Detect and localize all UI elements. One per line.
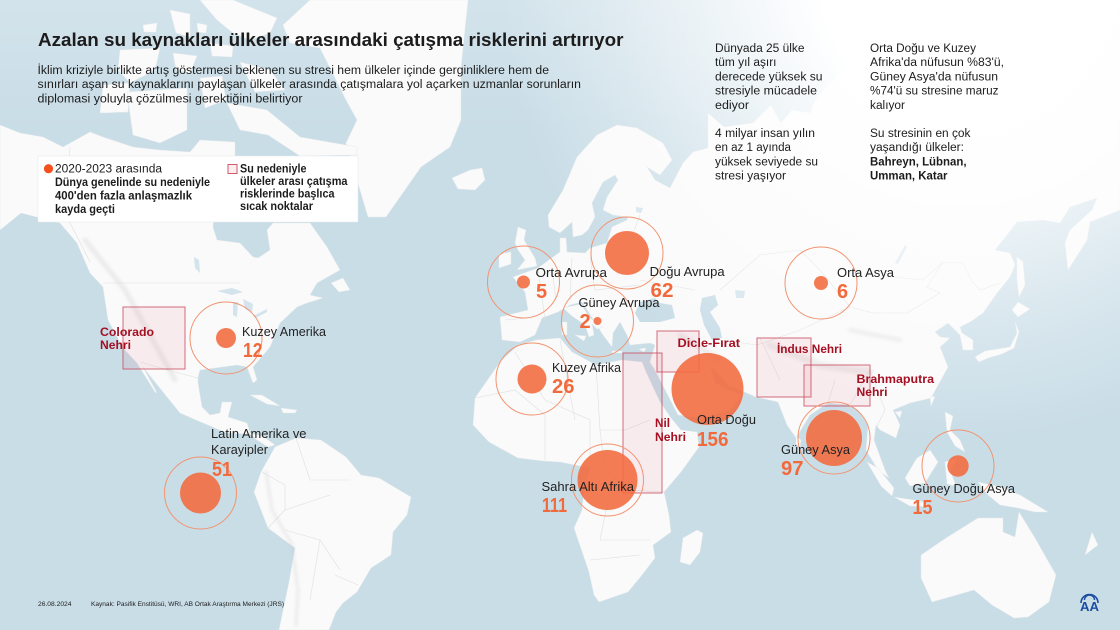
legend: conflict text bbox=[55, 164, 210, 216]
land: Newfoundland bbox=[331, 278, 350, 292]
region: Güney Doğu Asya: Güney Doğu Asya bbox=[912, 482, 1015, 496]
region: Kuzey Amerika: Kuzey Amerika bbox=[242, 325, 326, 339]
facts column 2: Su stresinin en çok bbox=[870, 128, 971, 140]
region: Sahra Altı Afrika: Sahra Altı Afrika bbox=[542, 480, 634, 494]
intro paragraph: sınırları aşan su kaynaklarını paylaşan ülkeler arasında çatışmalara yol açarken uzmanlar sorunların bbox=[38, 79, 581, 91]
hotspot: Brahmaputra Nehri: Brahmaputra bbox=[856, 372, 934, 386]
facts column 2 bbox=[870, 43, 1004, 182]
region: Latin Amerika ve Karayipler: Latin Amerika ve bbox=[211, 427, 307, 441]
land: Greenland bbox=[283, 0, 468, 217]
facts column 1 bbox=[715, 43, 822, 182]
land: Australia bbox=[921, 512, 1056, 618]
legend: hotspot text: ülkeler arası çatışma bbox=[240, 176, 348, 188]
facts column 2: Güney Asya'da nüfusun bbox=[870, 72, 998, 84]
region: Orta Avrupa bbox=[488, 246, 607, 318]
region: Sahra Altı Afrika bbox=[542, 444, 644, 517]
facts column 2: Afrika'da nüfusun %83'ü, bbox=[870, 57, 1004, 69]
date: 26.08.2024 bbox=[38, 601, 72, 608]
land: Indonesia and Philippines bbox=[796, 411, 1098, 555]
land: Africa bbox=[473, 338, 699, 602]
hotspot: Dicle-Fırat: Dicle-Fırat bbox=[678, 336, 740, 350]
land: South America bbox=[254, 438, 411, 630]
legend: conflict text: kayda geçti bbox=[55, 204, 115, 216]
facts column 2: Umman, Katar bbox=[870, 170, 948, 182]
region: Latin Amerika ve Karayipler: Karayipler bbox=[211, 443, 268, 457]
hotspot: Dicle-Fırat bbox=[657, 331, 740, 372]
region: Kuzey Amerika bbox=[190, 302, 326, 374]
hotspot: İndus Nehri bbox=[757, 338, 842, 397]
title: Azalan su kaynakları ülkeler arasındaki çatışma risklerini artırıyor bbox=[38, 30, 624, 50]
hotspot: Colorado Nehri: Colorado bbox=[100, 325, 154, 339]
source: Kaynak: Pasifik Enstitüsü, WRI, AB Ortak Araştırma Merkezi (JRS) bbox=[91, 601, 284, 608]
map top fade bbox=[0, 0, 1120, 500]
hotspot: Colorado Nehri bbox=[100, 307, 185, 369]
hotspot: Brahmaputra Nehri: Nehri bbox=[856, 385, 888, 399]
legend: conflict text: Dünya genelinde su nedeniyle bbox=[55, 177, 210, 189]
region: Orta Asya: 6 bbox=[837, 281, 848, 303]
region: Kuzey Amerika: 12 bbox=[243, 340, 262, 362]
land: Italy and Mediterranean islands bbox=[562, 304, 646, 353]
region: Orta Doğu: Orta Doğu bbox=[697, 413, 756, 427]
intro paragraph: İklim kriziyle birlikte artış göstermesi beklenen su stresi hem ülkeler içinde gerginliklere hem de bbox=[38, 64, 549, 77]
region: Güney Avrupa: Güney Avrupa bbox=[578, 296, 660, 310]
facts column 1: yüksek seviyede su bbox=[715, 156, 818, 168]
region: Güney Avrupa: 2 bbox=[580, 311, 591, 333]
legend: hotspot text: Su nedeniyle bbox=[240, 164, 306, 176]
facts column 2: Bahreyn, Lübnan, bbox=[870, 156, 966, 168]
region: Latin Amerika ve Karayipler bbox=[164, 427, 307, 529]
legend: hotspot text: risklerinde başlıca bbox=[240, 189, 335, 201]
region: Kuzey Afrika: Kuzey Afrika bbox=[552, 361, 621, 375]
region: Orta Asya bbox=[785, 247, 894, 319]
region: Güney Asya: 97 bbox=[781, 458, 804, 480]
seas: Black Sea, Caspian Sea, Baikal and lakes bbox=[635, 207, 907, 340]
region: Latin Amerika ve Karayipler: 51 bbox=[212, 459, 232, 481]
hotspot: Nil Nehri: Nehri bbox=[655, 430, 686, 444]
facts column 1: tüm yıl aşırı bbox=[715, 57, 776, 69]
land: Japan, Sakhalin and Taiwan bbox=[930, 257, 1030, 406]
region: Güney Avrupa bbox=[562, 285, 660, 357]
hotspot: İndus Nehri: İndus Nehri bbox=[777, 341, 842, 356]
region: Doğu Avrupa bbox=[591, 217, 725, 302]
region: Orta Avrupa: Orta Avrupa bbox=[536, 266, 607, 280]
facts column 1: stresi yaşıyor bbox=[715, 170, 786, 182]
region: Orta Asya: Orta Asya bbox=[837, 266, 894, 280]
intro paragraph: diplomasi yoluyla çözülmesi gerektiğini belirtiyor bbox=[38, 94, 303, 106]
land: United Kingdom and Ireland bbox=[499, 227, 537, 270]
country borders bbox=[66, 147, 1000, 600]
land: Iceland bbox=[452, 168, 485, 190]
facts column 1: ediyor bbox=[715, 100, 749, 112]
hotspot: Colorado Nehri: Nehri bbox=[100, 338, 131, 352]
region: Güney Doğu Asya bbox=[912, 430, 1015, 519]
legend: conflict text: 400'den fazla anlaşmazlık bbox=[55, 190, 193, 202]
facts column 1: 4 milyar insan yılın bbox=[715, 128, 815, 140]
facts column 1: stresiyle mücadele bbox=[715, 86, 817, 98]
facts column 1: Dünyada 25 ülke bbox=[715, 43, 804, 55]
region: Kuzey Afrika bbox=[496, 343, 621, 415]
intro paragraph bbox=[38, 64, 581, 106]
region: Güney Asya: Güney Asya bbox=[781, 443, 850, 457]
region: Sahra Altı Afrika: 111 bbox=[542, 495, 567, 517]
land: Eurasia bbox=[500, 0, 1120, 478]
legend: hotspot square bbox=[228, 164, 237, 174]
legend: conflict dot bbox=[44, 164, 53, 173]
facts column 1: derecede yüksek su bbox=[715, 72, 822, 84]
land: Madagascar bbox=[680, 530, 703, 565]
region: Orta Avrupa: 5 bbox=[536, 281, 547, 303]
region: Güney Doğu Asya: 15 bbox=[912, 497, 932, 519]
facts column 2: kalıyor bbox=[870, 100, 905, 112]
region: Güney Asya bbox=[781, 402, 870, 480]
facts column 2: %74'ü su stresine maruz bbox=[870, 86, 999, 98]
facts column 2: Orta Doğu ve Kuzey bbox=[870, 43, 976, 55]
region: Orta Doğu: 156 bbox=[697, 429, 728, 451]
region: Doğu Avrupa: 62 bbox=[650, 280, 674, 302]
mountain relief bbox=[85, 240, 900, 625]
lakes: North America bbox=[194, 257, 267, 318]
hotspot: Nil Nehri: Nil bbox=[655, 416, 670, 430]
legend: hotspot text bbox=[240, 164, 348, 213]
legend: conflict text: 2020-2023 arasında bbox=[55, 164, 163, 176]
region: Orta Doğu bbox=[672, 353, 756, 451]
icon: AA logo: AA bbox=[1080, 599, 1100, 614]
hotspot: Brahmaputra Nehri bbox=[804, 365, 934, 406]
hotspot: Nil Nehri bbox=[623, 353, 686, 493]
legend: hotspot text: sıcak noktalar bbox=[240, 201, 313, 213]
land: Canadian Arctic islands bbox=[100, 0, 357, 156]
legend panel bbox=[38, 156, 358, 222]
region: Kuzey Afrika: 26 bbox=[552, 376, 574, 398]
facts column 1: en az 1 ayında bbox=[715, 142, 792, 154]
region: Doğu Avrupa: Doğu Avrupa bbox=[650, 265, 725, 279]
facts column 2: yaşandığı ülkeler: bbox=[870, 142, 964, 154]
land: North America bbox=[0, 125, 340, 447]
land: Caribbean islands bbox=[250, 395, 297, 413]
